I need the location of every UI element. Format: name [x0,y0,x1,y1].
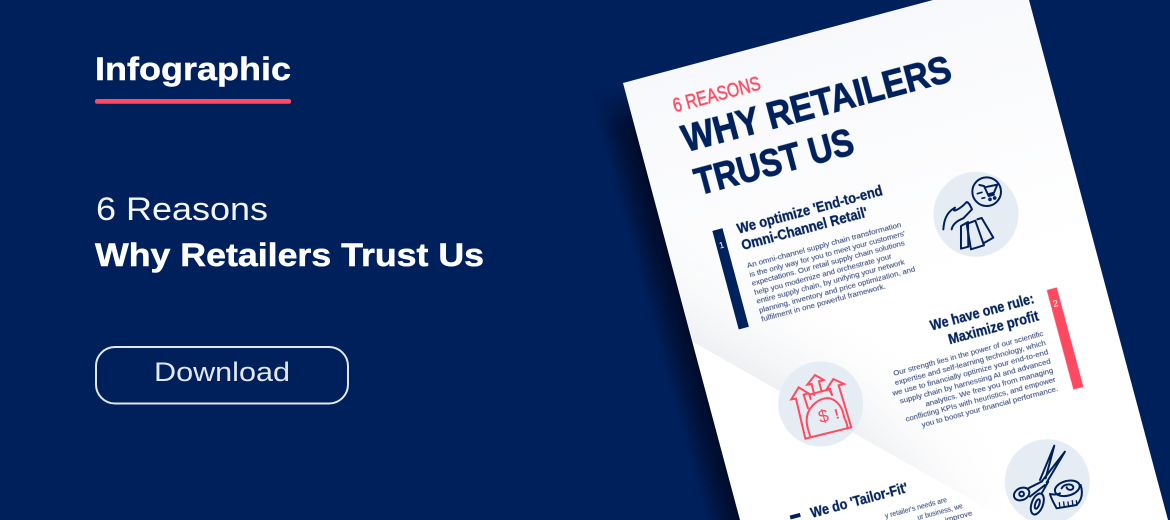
reason 2 body: you to boost your financial performance. [920,384,1059,429]
page title: TRUST US [690,121,858,204]
icon: money bag with arrows [778,362,863,446]
reason 1 number: 1 [718,240,725,250]
icon: shopping bags and cart [934,172,1018,257]
reason 2 number: 2 [1052,298,1059,309]
reason 2 body: conflicting KPIs with heuristics, and empower [905,375,1057,424]
left column title: Why Retailers Trust Us [95,237,484,273]
reason 1 body: planning, inventory and price optimization, and [758,264,916,315]
reason 1 body: expectations. Our retail supply chain solutions [751,238,906,288]
page sheet [623,0,1168,520]
page shadow [602,94,740,520]
reason 3 bar [790,513,801,519]
page text content [671,12,1109,520]
reason 1 heading: Omni-Channel Retail' [740,205,869,254]
reason 2 body: supply chain by harnessing AI and advanced [899,356,1052,406]
reason 1 body: entire supply chain, by unifying your network [755,258,906,306]
reason 2 heading: We have one rule: [928,291,1036,334]
reason 3 [789,466,973,520]
reason 2 body: analytics. We free you from managing [924,366,1054,409]
left column heading: Infographic: Infographic [95,51,291,87]
reason 2 heading: Maximize profit [947,309,1041,348]
reason 2 body [885,329,1059,435]
reason 2 [875,285,1083,435]
download button [96,347,348,404]
left column title: 6 Reasons [96,191,268,227]
reason 1 body: fulfilment in one powerful framework. [760,282,887,324]
reason 1 body: An omni-channel supply chain transformation [746,220,902,270]
icon: money bag with arrows: ! [832,405,841,422]
reason 1 body: help you modernize and orchestrate your [753,251,893,297]
reason 3 body: y retailer's needs are [884,495,948,520]
reason 1 [712,180,919,330]
page title: WHY RETAILERS [677,48,956,161]
reason 2 body: we use to financially optimize your end-to-end [890,347,1049,398]
left column heading: Infographic [95,51,291,104]
page title [677,48,968,204]
reason 3 body [884,490,973,520]
page kicker: 6 REASONS [671,73,763,117]
icon: scissors and measuring tape [1005,439,1090,520]
reason 1 heading: We optimize 'End-to-end [735,183,884,238]
reason 1 body [746,219,919,324]
reason 2 body: Our strength lies in the power of our scientific [892,329,1044,378]
left column title [95,191,484,273]
reason 1 body: is the only way for you to meet your customers' [748,228,907,279]
reason 2 bar [1047,287,1083,390]
page light sheen [684,304,926,474]
reason 1 bar [712,228,749,329]
download button: Download [154,357,290,387]
reason 2 body: expertise and self-learning technology, which [894,338,1047,387]
icon: money bag with arrows: $ [816,405,831,427]
infographic page preview [623,0,1168,520]
reason 2 heading [928,291,1041,352]
